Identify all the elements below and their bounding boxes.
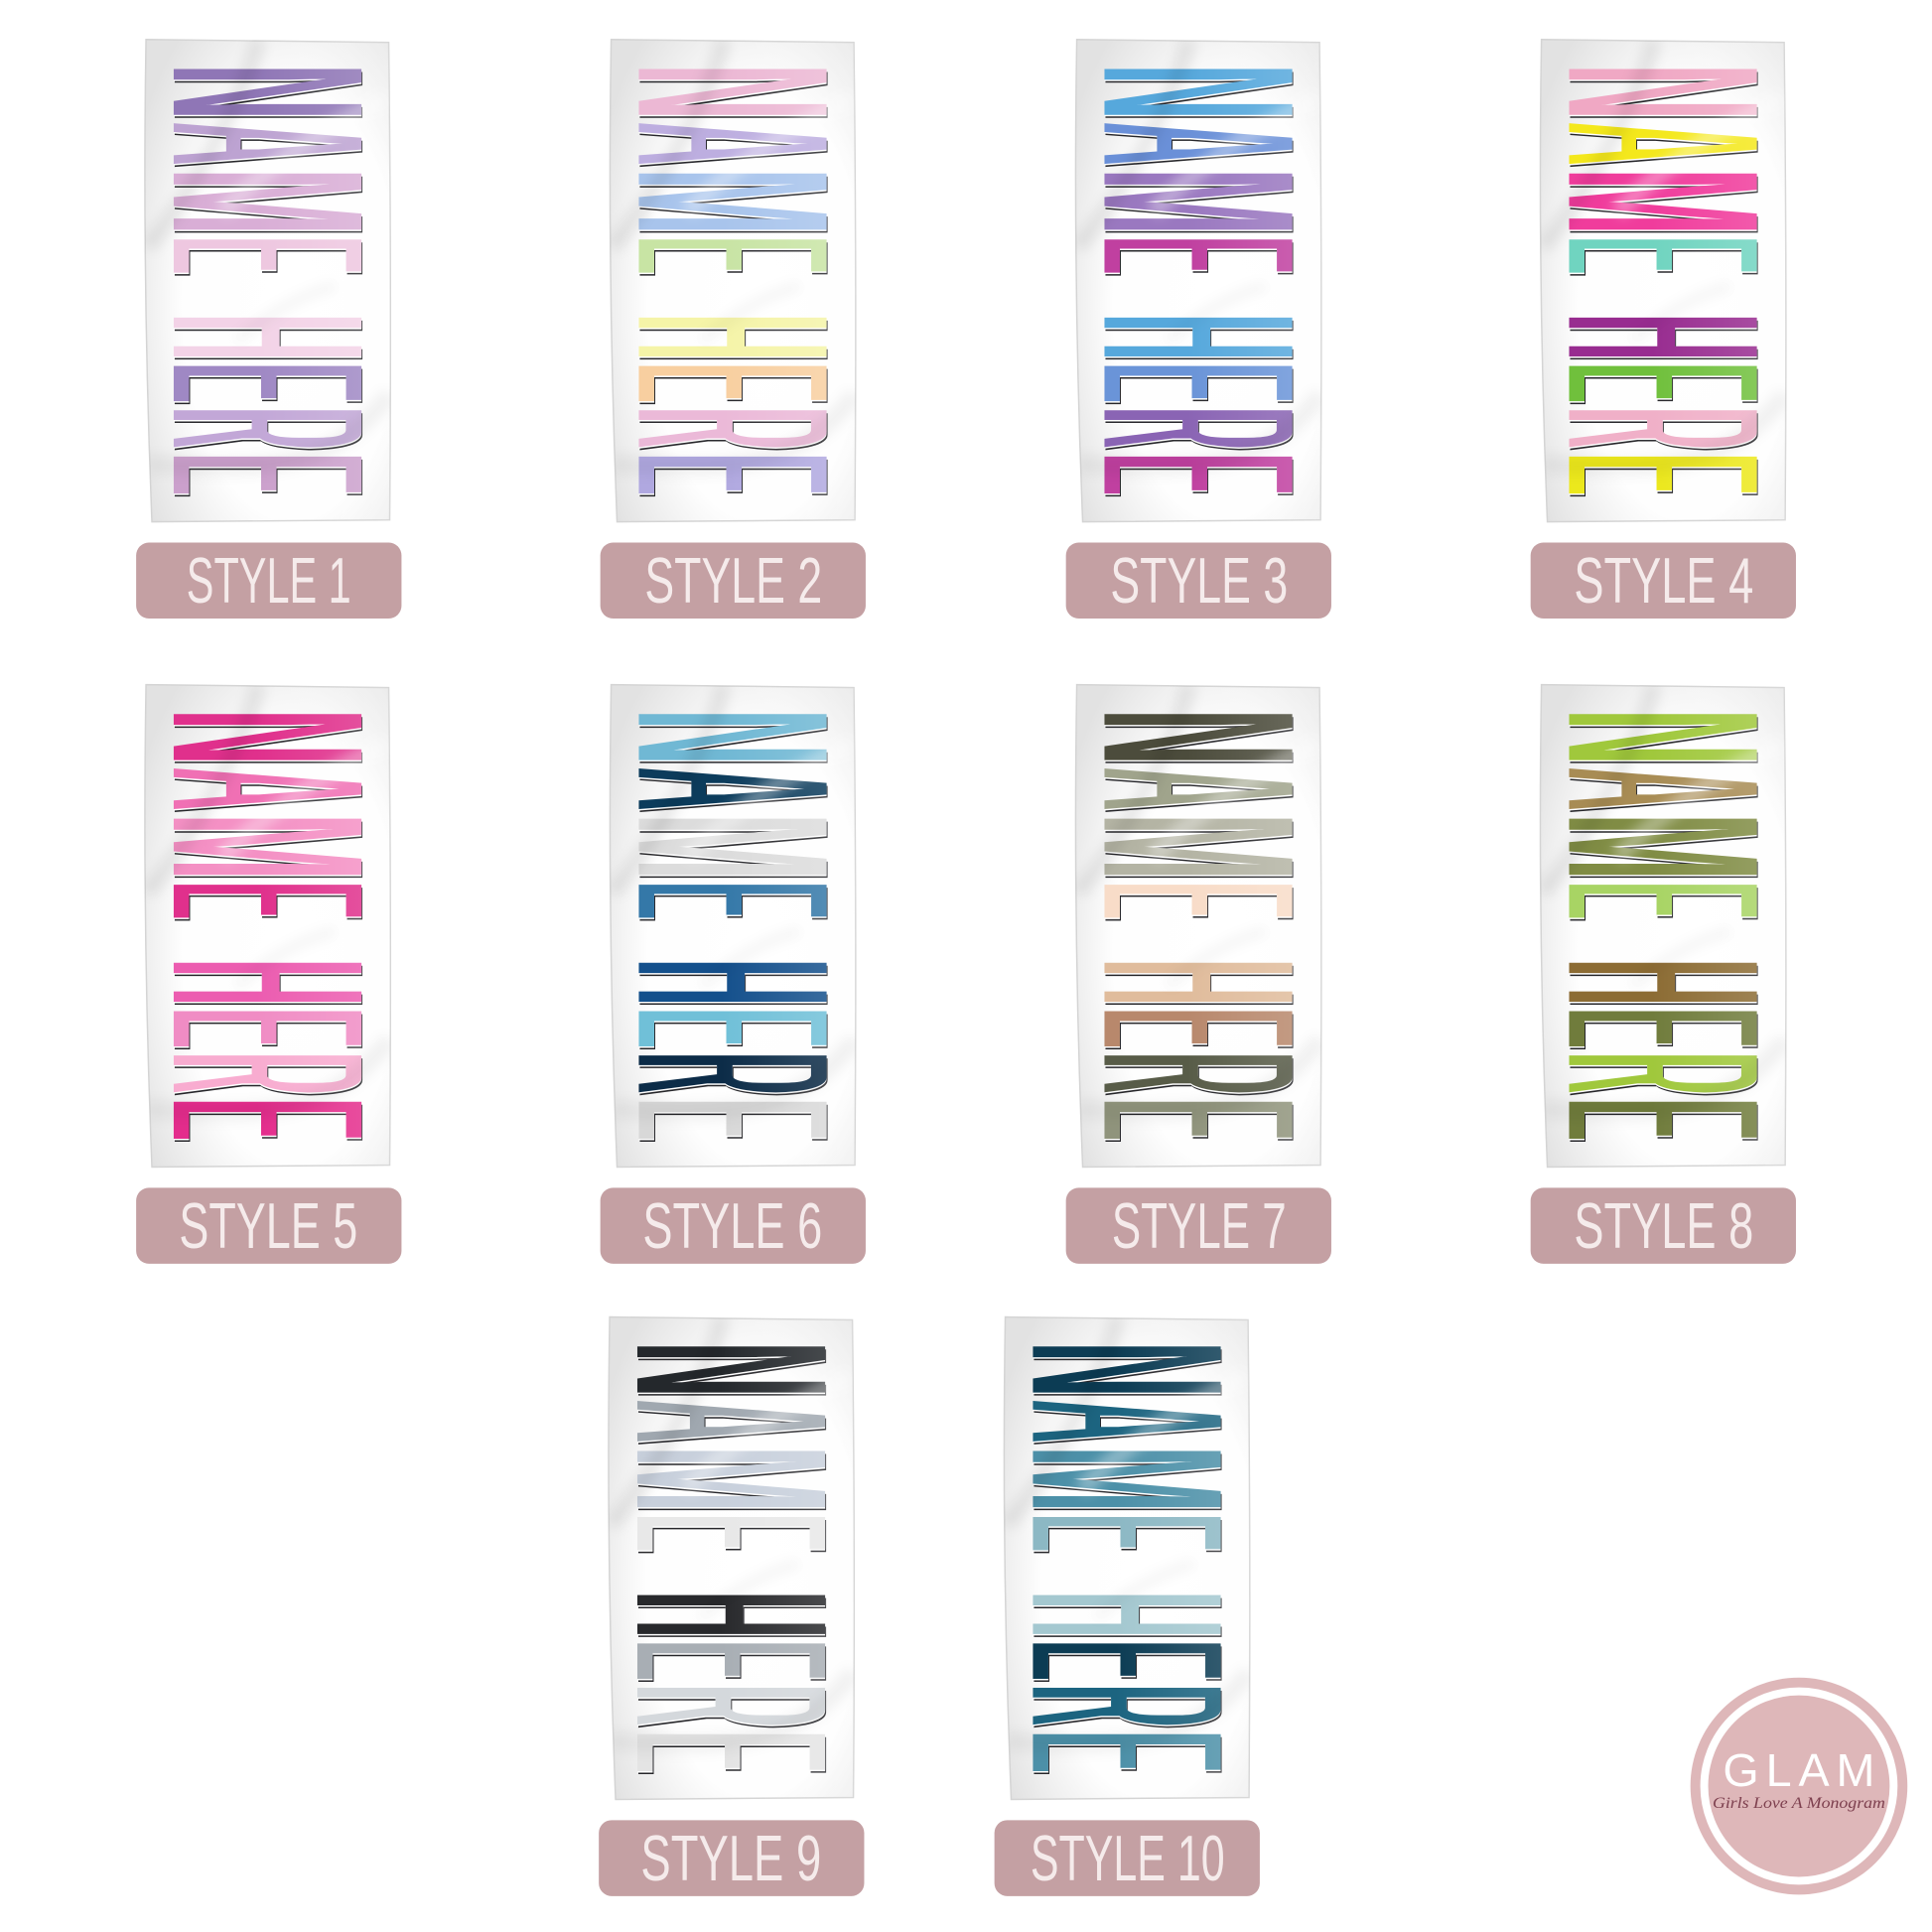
name lettering: E <box>959 1640 1294 1681</box>
towel: style 9 <box>564 1315 899 1896</box>
name lettering: A <box>1495 121 1830 167</box>
towel: style 8 <box>1495 683 1831 1264</box>
label: style 2 <box>601 543 866 619</box>
name lettering: M <box>101 814 435 880</box>
name lettering: E <box>961 1514 1295 1552</box>
name lettering: E <box>1497 882 1831 919</box>
name lettering: A <box>1031 121 1365 167</box>
name lettering: H <box>100 959 434 1006</box>
name lettering: E <box>564 1730 897 1773</box>
label: style 5: STYLE 5 <box>179 1190 357 1262</box>
name lettering: E <box>1497 236 1831 274</box>
label: style 9: STYLE 9 <box>640 1823 821 1894</box>
name lettering: N <box>1032 65 1366 119</box>
name lettering: M <box>101 169 435 234</box>
towel fabric <box>145 40 390 522</box>
name lettering: A <box>1031 766 1365 812</box>
name lettering: E <box>1031 362 1365 403</box>
name lettering: M <box>1032 814 1366 880</box>
name lettering: E <box>1495 1008 1830 1048</box>
name lettering: M <box>1496 169 1831 234</box>
name lettering <box>1495 65 1831 495</box>
name lettering: N <box>1496 710 1831 764</box>
name lettering: M <box>565 1447 898 1512</box>
name lettering: R <box>564 1684 898 1727</box>
name lettering: M <box>1496 814 1831 880</box>
name lettering: H <box>100 314 434 360</box>
name lettering: N <box>101 65 436 119</box>
towel fabric <box>145 685 390 1168</box>
towel: style 2 <box>565 38 900 619</box>
name lettering: M <box>960 1447 1295 1512</box>
name lettering: R <box>1031 407 1365 450</box>
name lettering: E <box>959 1730 1293 1773</box>
towel fabric <box>610 685 856 1168</box>
label: style 3 <box>1066 543 1331 619</box>
name lettering: R <box>100 1052 435 1095</box>
name lettering: N <box>566 65 900 119</box>
name lettering: E <box>100 453 434 495</box>
name lettering: A <box>564 1399 897 1444</box>
name lettering <box>564 1342 899 1773</box>
name lettering: H <box>1496 314 1829 360</box>
towel: style 4 <box>1495 38 1831 619</box>
label: style 7: STYLE 7 <box>1112 1190 1287 1262</box>
name lettering: E <box>565 1098 898 1141</box>
label: style 6: STYLE 6 <box>642 1190 822 1262</box>
name lettering: N <box>565 1342 899 1397</box>
name lettering: R <box>1031 1052 1365 1095</box>
label: style 3: STYLE 3 <box>1110 545 1288 617</box>
towel: style 1 <box>100 38 436 619</box>
name lettering: N <box>1032 710 1366 764</box>
name lettering: E <box>1033 236 1366 274</box>
name lettering: E <box>567 882 900 919</box>
name lettering: H <box>1032 314 1364 360</box>
name lettering: E <box>1495 453 1830 495</box>
name lettering <box>565 65 900 495</box>
name lettering <box>1495 710 1831 1141</box>
label: style 1: STYLE 1 <box>187 545 351 617</box>
label: style 7 <box>1066 1187 1331 1264</box>
name lettering: E <box>1495 1098 1830 1141</box>
name lettering: A <box>565 766 899 812</box>
name lettering: R <box>1495 407 1830 450</box>
name lettering: E <box>565 362 899 403</box>
name lettering: R <box>100 407 435 450</box>
name lettering: A <box>1495 766 1830 812</box>
label: style 10: STYLE 10 <box>1031 1823 1225 1894</box>
name lettering: E <box>1031 1008 1365 1048</box>
name lettering: N <box>566 710 900 764</box>
name lettering: M <box>1032 169 1366 234</box>
name lettering: R <box>565 407 899 450</box>
towel fabric <box>1540 40 1786 522</box>
label: style 2: STYLE 2 <box>644 545 822 617</box>
name lettering: H <box>564 1591 897 1638</box>
name lettering: E <box>1031 1098 1364 1141</box>
towel fabric <box>1004 1317 1250 1799</box>
name lettering: E <box>100 1008 435 1048</box>
name lettering: M <box>566 169 900 234</box>
towel fabric <box>609 1317 854 1799</box>
name lettering: E <box>565 1008 899 1048</box>
towel: style 3 <box>1031 38 1366 619</box>
name lettering: E <box>101 236 435 274</box>
name lettering: E <box>100 1098 434 1141</box>
name lettering: H <box>1032 959 1364 1006</box>
towel fabric <box>1075 40 1321 522</box>
label: style 10 <box>995 1820 1260 1896</box>
name lettering <box>1031 65 1366 495</box>
name lettering <box>959 1342 1295 1773</box>
logo tagline: Girls Love A Monogram <box>1713 1795 1885 1812</box>
name lettering: E <box>564 1640 898 1681</box>
name lettering: A <box>100 121 434 167</box>
towel: style 7 <box>1031 683 1366 1264</box>
name lettering <box>565 710 900 1141</box>
name lettering: N <box>960 1342 1295 1397</box>
name lettering: R <box>959 1684 1294 1727</box>
logo: GLAM badge <box>1691 1678 1907 1894</box>
towel fabric <box>1075 685 1321 1168</box>
name lettering <box>1031 710 1366 1141</box>
towel fabric <box>1540 685 1786 1168</box>
towel: style 5 <box>100 683 436 1264</box>
name lettering: A <box>100 766 434 812</box>
name lettering: H <box>1496 959 1829 1006</box>
name lettering: A <box>959 1399 1294 1444</box>
name lettering: E <box>100 362 435 403</box>
name lettering: R <box>565 1052 899 1095</box>
name lettering <box>100 65 436 495</box>
name lettering: E <box>567 236 900 274</box>
name lettering: R <box>1495 1052 1830 1095</box>
name lettering: H <box>959 1591 1293 1638</box>
label: style 1 <box>136 543 401 619</box>
name lettering: M <box>566 814 900 880</box>
name lettering <box>100 710 436 1141</box>
towel: style 10 <box>959 1315 1295 1896</box>
name lettering: N <box>101 710 436 764</box>
towel: style 6 <box>565 683 900 1264</box>
towel fabric <box>610 40 856 522</box>
name lettering: A <box>565 121 899 167</box>
label: style 4: STYLE 4 <box>1574 545 1753 617</box>
name lettering: E <box>1495 362 1830 403</box>
name lettering: E <box>1031 453 1364 495</box>
name lettering: E <box>565 453 898 495</box>
name lettering: H <box>565 959 898 1006</box>
label: style 8: STYLE 8 <box>1574 1190 1753 1262</box>
name lettering: H <box>565 314 898 360</box>
name lettering: E <box>101 882 435 919</box>
name lettering: E <box>1033 882 1366 919</box>
logo wordmark: GLAM <box>1723 1744 1874 1796</box>
name lettering: E <box>565 1514 898 1552</box>
name lettering: N <box>1496 65 1831 119</box>
